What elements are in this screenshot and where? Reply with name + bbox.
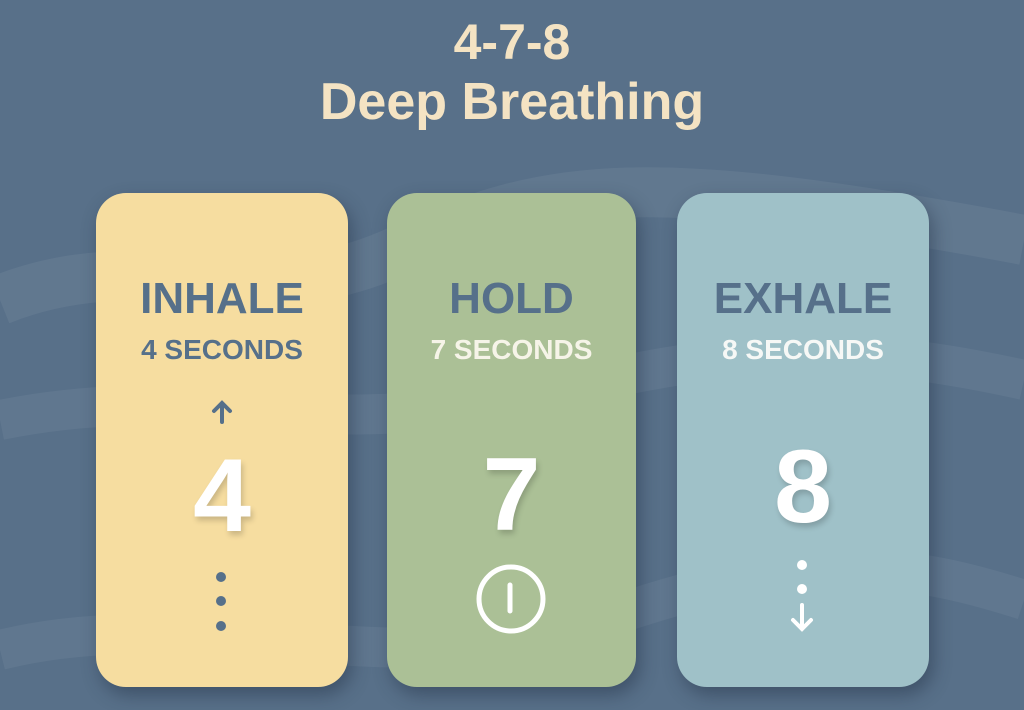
text: 8 seconds: 8 SECONDS	[722, 334, 884, 365]
text: 7 seconds: 7 SECONDS	[431, 334, 592, 365]
heading: exhale: EXHALE	[714, 274, 892, 323]
subtitle: Deep Breathing	[320, 73, 704, 131]
number 4: 4	[193, 438, 251, 554]
icon: up arrow	[212, 400, 232, 424]
title: 4-7-8	[454, 14, 570, 70]
panel: exhale	[677, 193, 929, 687]
text: 4 seconds: 4 SECONDS	[141, 334, 303, 365]
heading: hold: HOLD	[449, 274, 574, 323]
icon: dots	[216, 572, 226, 631]
panel: hold	[387, 193, 636, 687]
number 8: 8	[774, 429, 832, 545]
heading: inhale: INHALE	[140, 274, 304, 323]
icon: pause circle	[476, 564, 546, 634]
number 7: 7	[483, 437, 540, 553]
panel: inhale	[96, 193, 348, 687]
icon: dots down arrow	[790, 560, 814, 632]
